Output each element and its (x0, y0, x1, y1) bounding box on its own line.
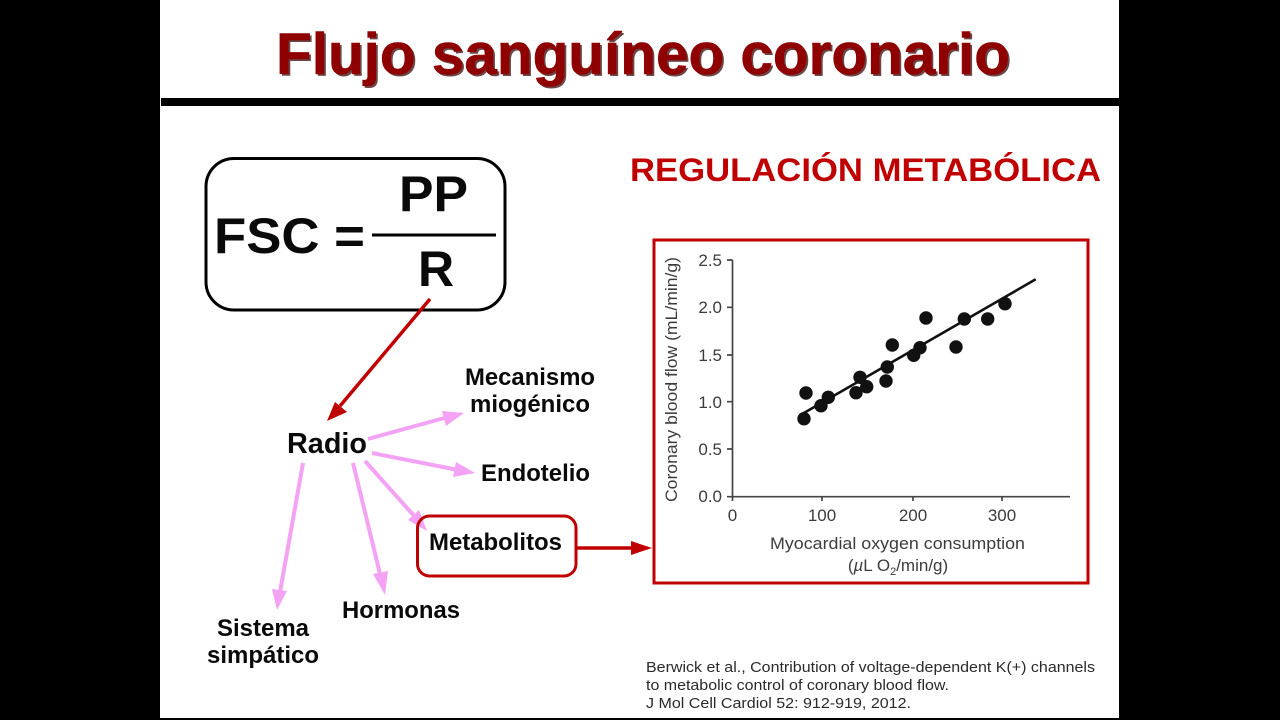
y axis tick labels: 0.5 (698, 440, 722, 459)
label: mecanismo miogénico: miogénico (470, 391, 590, 418)
box: metabolitos (418, 516, 576, 576)
axes (727, 260, 1070, 501)
title: Flujo sanguíneo coronario (276, 22, 1010, 87)
y axis tick labels: 1.5 (698, 346, 722, 365)
label: sistema simpático (207, 615, 319, 669)
trend line (802, 279, 1036, 414)
label: hormonas: Hormonas (342, 597, 460, 624)
slide background (160, 0, 1119, 718)
x axis tick labels: 300 (988, 506, 1016, 525)
label: sistema simpático: simpático (207, 642, 319, 669)
formula left side: FSC = (214, 208, 365, 264)
x axis title (770, 534, 1025, 578)
x axis tick labels: 0 (728, 506, 737, 525)
y axis tick labels (698, 251, 722, 506)
x axis title: (µL O (848, 556, 890, 575)
arrow: formula to radio (327, 299, 430, 421)
box: metabolitos: Metabolitos (429, 529, 562, 556)
denominator: R (418, 241, 454, 297)
y axis title: Coronary blood flow (mL/min/g) (663, 257, 681, 502)
x axis tick labels: 200 (899, 506, 927, 525)
x axis title: /min/g) (896, 556, 948, 575)
fraction bar (372, 234, 496, 236)
label: radio: Radio (287, 428, 367, 460)
citation: to metabolic control of coronary blood flow. (646, 678, 949, 694)
title: Flujo sanguíneo coronario (278, 24, 1012, 89)
label: mecanismo miogénico: Mecanismo (465, 364, 595, 391)
y axis tick labels: 2.5 (698, 251, 722, 270)
arrow: radio to hormonas (353, 463, 388, 595)
data points (797, 297, 1012, 425)
x axis tick labels (728, 506, 1016, 525)
scatter chart (663, 251, 1070, 578)
citation: Berwick et al., Contribution of voltage-dependent K(+) channels (646, 660, 1095, 676)
panel: formula (206, 158, 505, 310)
label: endotelio: Endotelio (481, 460, 590, 487)
arrow: radio to endotelio (372, 453, 475, 477)
title rule (161, 98, 1119, 106)
heading: regulación metabólica: REGULACIÓN METABÓLICA (630, 152, 1101, 188)
arrow: radio to metabolitos (365, 461, 427, 531)
panel: chart frame (654, 240, 1088, 583)
arrow: radio to mecanismo miogénico (368, 411, 464, 439)
numerator: PP (399, 166, 468, 222)
citation: J Mol Cell Cardiol 52: 912-919, 2012. (646, 696, 911, 712)
y axis tick labels: 1.0 (698, 393, 722, 412)
label: mecanismo miogénico (465, 364, 595, 418)
label: sistema simpático: Sistema (217, 615, 310, 642)
y axis tick labels: 2.0 (698, 298, 722, 317)
x axis title: Myocardial oxygen consumption (770, 534, 1025, 553)
arrow: metabolitos to chart (577, 541, 652, 555)
formula box (206, 158, 505, 310)
y axis tick labels: 0.0 (698, 487, 722, 506)
arrow: radio to sistema simpático (272, 463, 303, 610)
x axis title: 2 (890, 566, 896, 578)
citation (646, 660, 1095, 712)
x axis tick labels: 100 (808, 506, 836, 525)
